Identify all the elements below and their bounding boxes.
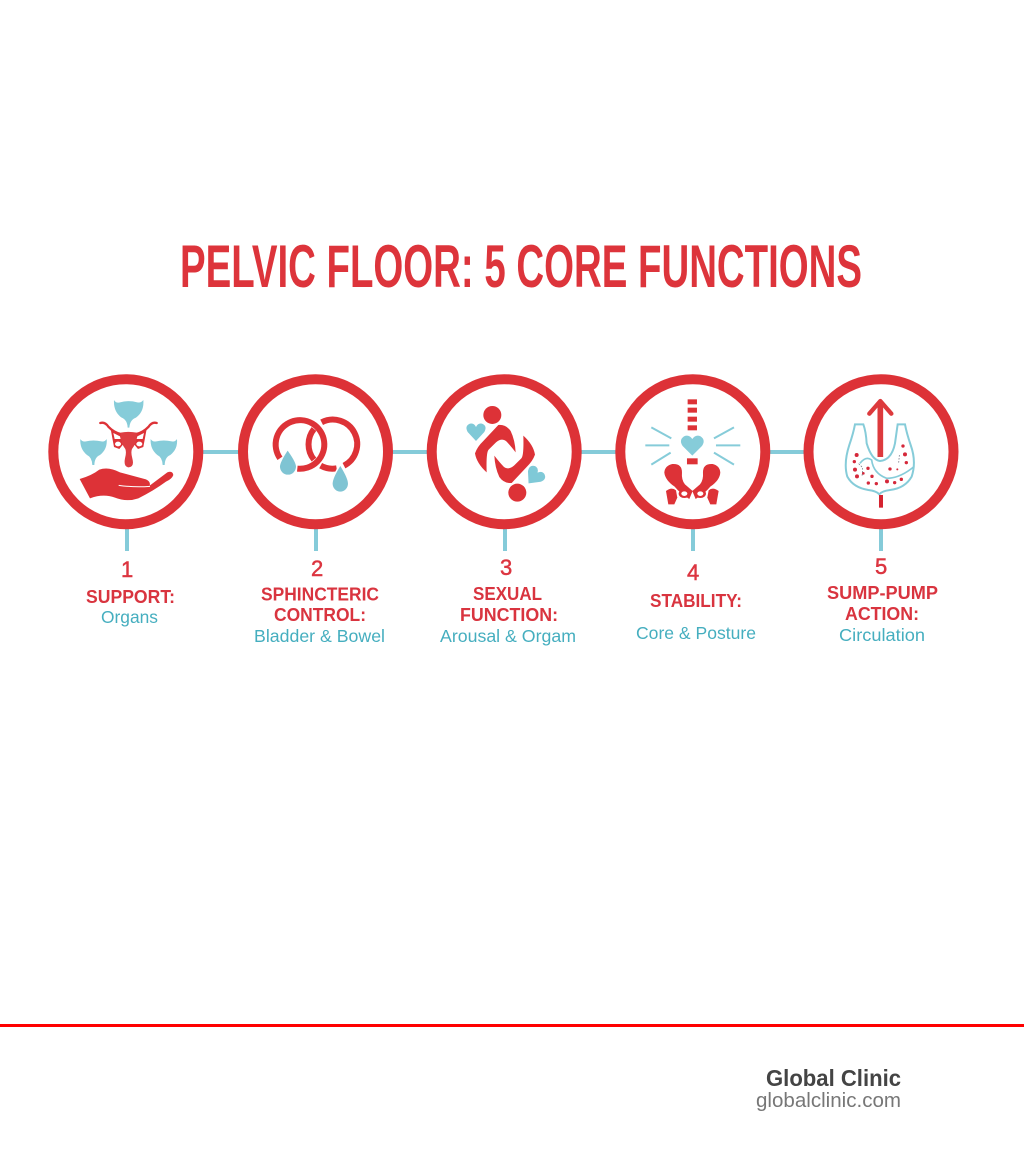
label 1: support: SUPPORT: — [86, 587, 175, 607]
ring 3 — [432, 379, 577, 524]
icon: circulation dots — [853, 444, 908, 485]
ring 5 — [808, 379, 954, 524]
icon: radiating lines — [645, 427, 740, 465]
icon: up arrow — [869, 401, 891, 457]
label 5: sump-pump action: SUMP-PUMP — [827, 583, 938, 603]
icon: sump pump arrow and vessel — [846, 401, 914, 508]
icon: two embracing figures with hearts — [466, 406, 547, 502]
icon: spine segments — [687, 399, 698, 464]
label 2: sphincteric control: SPHINCTERIC — [261, 584, 379, 604]
ring 4 — [620, 379, 765, 524]
icon: hand supporting organs — [80, 400, 177, 500]
connector lines — [125, 450, 883, 551]
label 3: sexual function: Arousal & Orgam — [440, 626, 576, 646]
icon: right drop — [330, 462, 351, 493]
label 5: sump-pump action: Circulation — [839, 625, 925, 645]
icon: outlet stem — [879, 495, 883, 508]
icon: vessel outline — [846, 424, 914, 494]
icon: right heart — [521, 464, 547, 489]
label 1: support: 1 — [121, 557, 133, 582]
icon: left heart — [466, 423, 486, 441]
icon: sphincter rings and drops — [276, 420, 357, 493]
icon: spine, heart and pelvis — [645, 399, 740, 504]
icon: lower figure — [494, 436, 535, 483]
label 5: sump-pump action: 5 — [875, 554, 887, 579]
icon: pelvis openings — [681, 491, 703, 496]
icon: uterus — [100, 423, 157, 467]
icon: left ring — [276, 420, 324, 469]
footer rule — [0, 1024, 1024, 1027]
label 4: stability: STABILITY: — [650, 591, 742, 611]
label 5: sump-pump action — [827, 554, 938, 645]
icon: inner curve — [860, 458, 914, 478]
label 4: stability — [636, 560, 756, 643]
label 2: sphincteric control: 2 — [311, 556, 323, 581]
label 4: stability: 4 — [687, 560, 699, 585]
label 3: sexual function — [440, 555, 576, 646]
ring 1 — [53, 379, 198, 524]
label 2: sphincteric control — [254, 556, 385, 646]
icon: upper head — [483, 406, 501, 424]
label 3: sexual function: 3 — [500, 555, 512, 580]
label 4: stability: Core & Posture — [636, 623, 756, 643]
icon: right ring — [309, 420, 357, 469]
icon: hand finger line — [119, 485, 150, 487]
icon: pelvis — [664, 464, 720, 504]
icon: small grey marks — [859, 455, 899, 477]
icon: lower head — [508, 484, 526, 502]
label 1: support: Organs — [101, 607, 158, 627]
label 3: sexual function: SEXUAL — [473, 584, 542, 604]
label 3: sexual function: FUNCTION: — [460, 605, 558, 625]
label 5: sump-pump action: ACTION: — [845, 604, 919, 624]
footer brand: globalclinic.com — [756, 1090, 901, 1112]
icon: upper figure — [475, 425, 516, 472]
footer brand — [756, 1065, 901, 1112]
label 2: sphincteric control: CONTROL: — [274, 605, 366, 625]
icon: left drop — [280, 451, 296, 475]
label 2: sphincteric control: Bladder & Bowel — [254, 626, 385, 646]
icon: top bladder — [114, 400, 143, 428]
icon: heart — [681, 436, 704, 456]
label 1: support — [86, 557, 175, 627]
icon: open hand — [80, 468, 173, 500]
icon: left bladder — [80, 439, 107, 465]
icon: right bladder — [151, 439, 177, 465]
footer brand: Global Clinic — [766, 1065, 901, 1091]
ring 2 — [243, 379, 388, 524]
